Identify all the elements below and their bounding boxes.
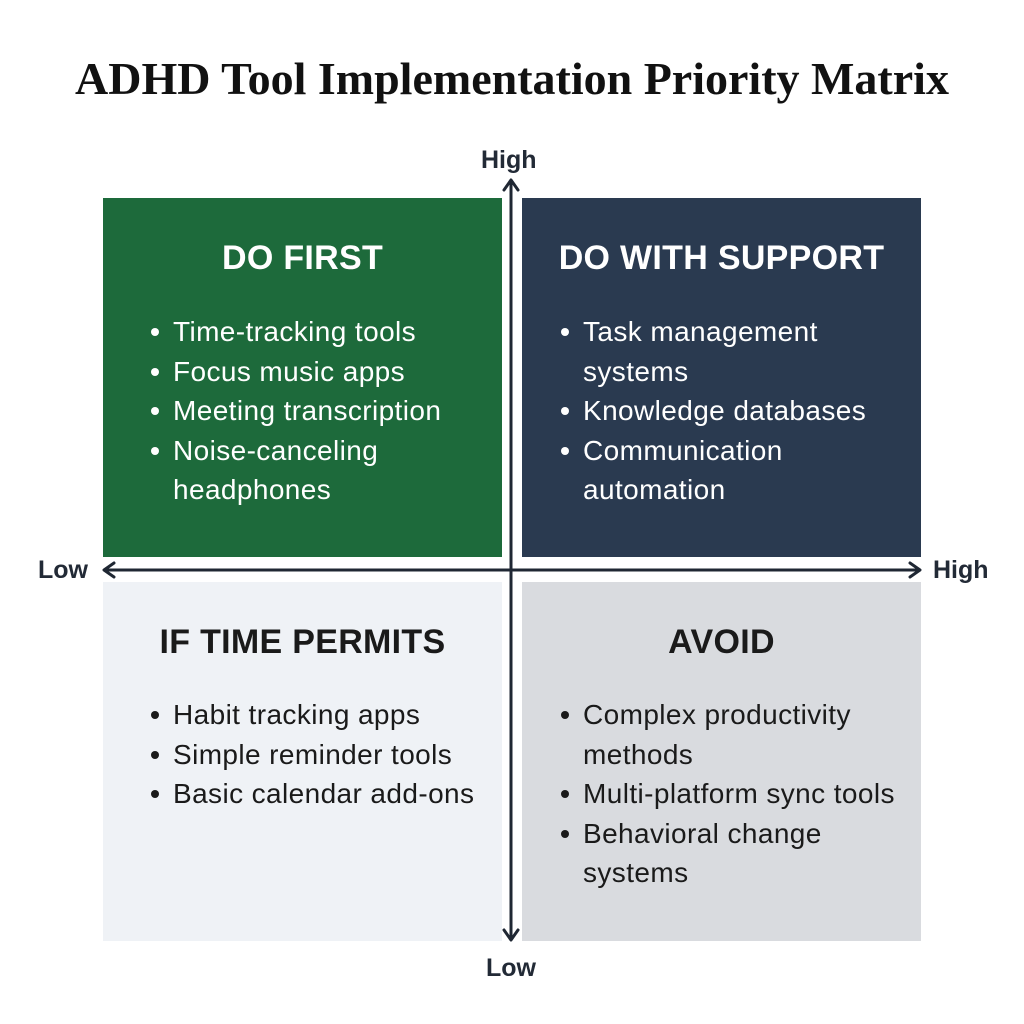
axis label: high right: High — [933, 556, 989, 584]
list: do first: Meeting transcription — [173, 395, 441, 426]
list: do with support: Communication — [583, 434, 783, 466]
axis label: low left: Low — [38, 556, 88, 584]
list: avoid: Behavioral change — [583, 818, 822, 848]
title: ADHD Tool Implementation Priority Matrix — [75, 53, 949, 104]
list: do with support: systems — [583, 356, 688, 386]
list: do first: Noise-canceling — [173, 434, 378, 466]
list: do first: headphones — [173, 474, 331, 505]
heading: avoid: AVOID — [668, 623, 775, 661]
heading: do first: DO FIRST — [222, 239, 383, 277]
list: do with support: automation — [583, 474, 726, 505]
list: avoid: methods — [583, 738, 693, 770]
heading: do with support: DO WITH SUPPORT — [559, 239, 884, 277]
quadrant: do with support — [522, 198, 921, 557]
list: do with support: Knowledge databases — [583, 395, 866, 426]
list: avoid — [561, 699, 895, 888]
list: if time permits: Basic calendar add-ons — [173, 778, 474, 809]
list: do with support: Task management — [583, 316, 818, 347]
axis label: low bottom: Low — [486, 954, 536, 982]
quadrant: do first — [103, 198, 502, 557]
list: do first — [151, 316, 441, 505]
list: avoid: systems — [583, 857, 688, 888]
list: if time permits: Habit tracking apps — [173, 699, 420, 730]
axis label: high top: High — [481, 146, 537, 174]
list: if time permits — [151, 699, 474, 809]
list: avoid: Complex productivity — [583, 699, 851, 730]
quadrant: if time permits — [103, 582, 502, 941]
list: avoid: Multi-platform sync tools — [583, 778, 895, 809]
quadrant: avoid — [522, 582, 921, 941]
list: do first: Focus music apps — [173, 356, 405, 386]
list: do first: Time-tracking tools — [173, 316, 416, 347]
list: if time permits: Simple reminder tools — [173, 738, 452, 770]
list: do with support — [561, 316, 866, 505]
heading: if time permits: IF TIME PERMITS — [160, 623, 445, 661]
